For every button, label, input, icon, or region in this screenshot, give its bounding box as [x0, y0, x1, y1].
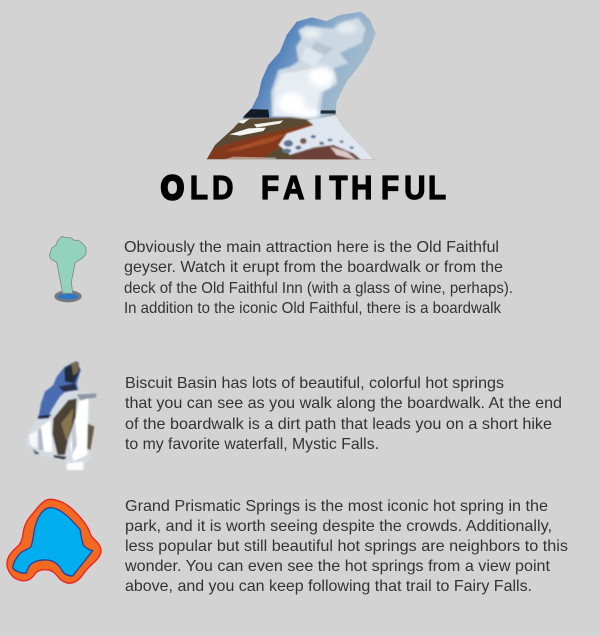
text block: Grand Prismatic Springs: wonder. You can even see the hot springs from a view point: [124, 558, 551, 575]
text block: Old Faithful geyser: deck of the Old Faithful Inn (with a glass of wine, perhaps).: [124, 280, 513, 297]
text block: Old Faithful geyser: [124, 239, 513, 317]
water body: [26, 388, 97, 470]
text block: Grand Prismatic Springs: [124, 498, 568, 595]
text block: Grand Prismatic Springs: above, and you can keep following that trail to Fairy Falls.: [125, 578, 532, 595]
cliff rock: [52, 398, 77, 455]
text block: Grand Prismatic Springs: park, and it is worth seeing despite the crowds. Additionally,: [125, 518, 552, 535]
text block: Biscuit Basin: of the boardwalk is a dirt path that leads you on a short hike: [125, 416, 552, 433]
text block: Grand Prismatic Springs: Grand Prismatic Springs is the most iconic hot spring in the: [125, 498, 548, 515]
text block: Biscuit Basin: Biscuit Basin has lots of beautiful, colorful hot springs: [125, 375, 504, 392]
text block: Old Faithful geyser: In addition to the iconic Old Faithful, there is a boardwalk: [124, 300, 502, 317]
text block: Biscuit Basin: [125, 375, 562, 453]
text block: Old Faithful geyser: Obviously the main attraction here is the Old Faithful: [124, 239, 499, 256]
upper blue rock: [38, 361, 81, 418]
left water falls: [41, 420, 52, 452]
text block: Biscuit Basin: that you can see as you walk along the boardwalk. At the end: [125, 395, 562, 412]
text block: Biscuit Basin: to my favorite waterfall, Mystic Falls.: [125, 436, 379, 453]
distant dark rock: [243, 109, 269, 118]
text block: Old Faithful geyser: geyser. Watch it erupt from the boardwalk or from the: [124, 259, 503, 276]
geyser photo silhouette: [203, 8, 380, 162]
icon: waterfall photo: [26, 361, 97, 470]
ground: [203, 114, 377, 162]
title: OLD FAITHFUL: [161, 170, 446, 206]
icon: hot spring: [7, 499, 101, 583]
right water falls: [70, 398, 88, 461]
text block: Grand Prismatic Springs: less popular but still beautiful hot springs are neighbors to this: [125, 538, 568, 555]
icon: geyser: [49, 236, 86, 302]
